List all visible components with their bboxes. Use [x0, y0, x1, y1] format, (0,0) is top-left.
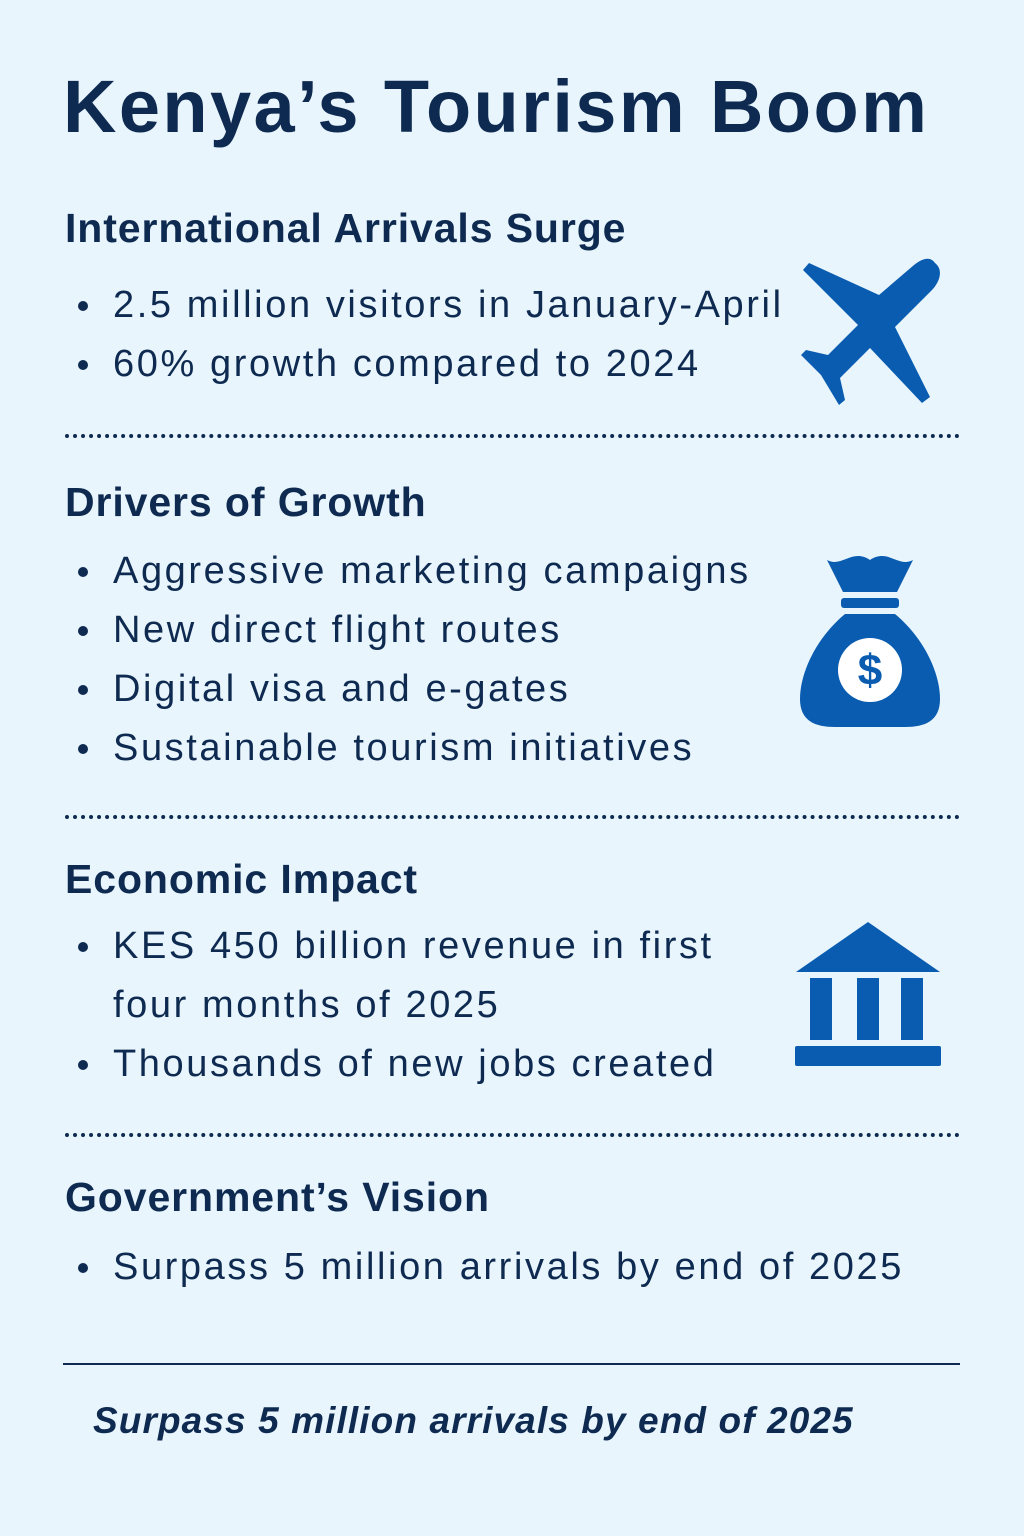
bullet list: economic: [78, 925, 717, 1085]
title: Kenya’s Tourism Boom: [63, 65, 929, 148]
bullet list: drivers: [78, 550, 751, 769]
icon: airplane: [801, 258, 940, 405]
icon: bank: [795, 922, 941, 1066]
icon: money bag: $: [858, 646, 882, 695]
heading: drivers: Drivers of Growth: [65, 479, 427, 525]
bullet list: economic: KES 450 billion revenue in first: [113, 925, 714, 967]
bullet list: arrivals: 60% growth compared to 2024: [113, 343, 701, 385]
bullet list: drivers: New direct flight routes: [113, 609, 562, 651]
heading: government vision: Government’s Vision: [65, 1174, 490, 1220]
bullet list: arrivals: [78, 284, 784, 385]
bullet list: drivers: Digital visa and e-gates: [113, 668, 570, 710]
bullet list: drivers: Aggressive marketing campaigns: [113, 550, 751, 592]
icon: money bag: [800, 556, 940, 727]
bullet: vision: Surpass 5 million arrivals by end of 2025: [113, 1246, 904, 1288]
bullet list: drivers: Sustainable tourism initiatives: [113, 727, 694, 769]
heading: economic impact: Economic Impact: [65, 856, 418, 902]
bullet list: economic: four months of 2025: [113, 984, 500, 1026]
bullet list: economic: Thousands of new jobs created: [113, 1043, 717, 1085]
bullet list: arrivals: 2.5 million visitors in January-April: [113, 284, 784, 326]
footer callout: Surpass 5 million arrivals by end of 2025: [93, 1400, 854, 1441]
heading: international arrivals: International Arrivals Surge: [65, 205, 626, 251]
